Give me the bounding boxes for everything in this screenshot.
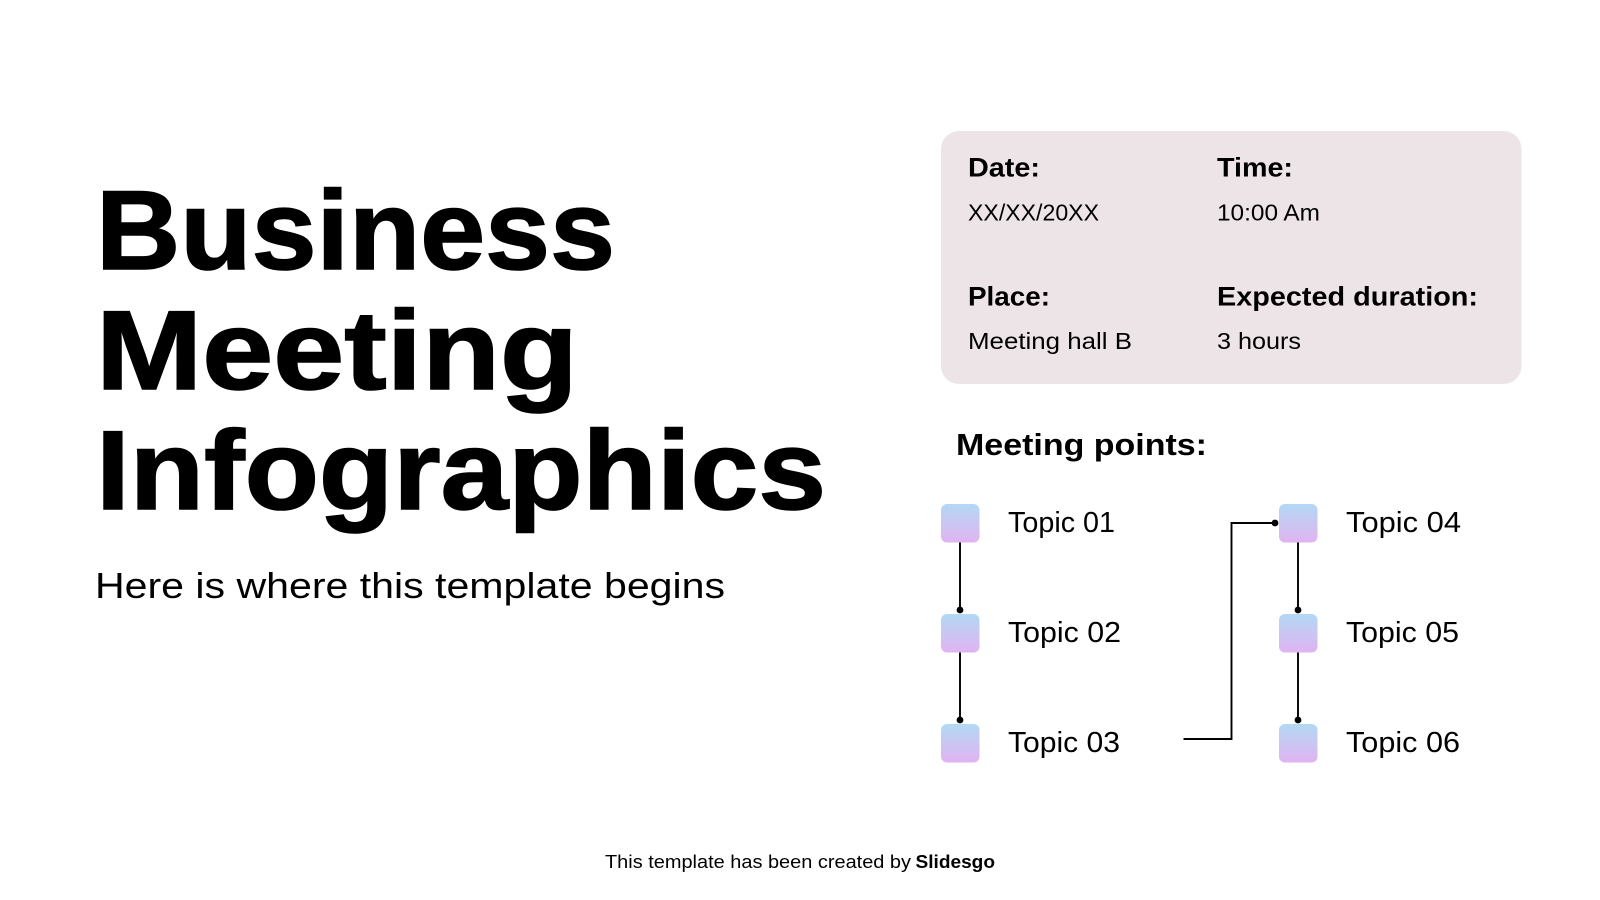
topic 03: Topic 03 (1008, 727, 1120, 759)
title: Business (96, 168, 615, 293)
date label: Date: (968, 152, 1040, 182)
topic 03 (941, 724, 1120, 762)
topic 06: Topic 06 (1346, 727, 1460, 759)
topic 01: Topic 01 (1008, 507, 1115, 539)
topic 04 (1279, 504, 1461, 542)
place label: Place: (968, 282, 1050, 312)
time label: Time: (1217, 152, 1293, 182)
footer credit: Slidesgo (916, 851, 995, 872)
panel: meeting details (941, 131, 1522, 384)
topic 05 (1279, 614, 1459, 652)
duration label: Expected duration: (1217, 282, 1478, 312)
duration value: 3 hours (1217, 328, 1301, 354)
topic 02 (941, 614, 1121, 652)
topic 04: Topic 04 (1346, 507, 1461, 539)
topic 01 (941, 504, 1115, 542)
subtitle: Here is where this template begins (95, 565, 725, 606)
topic 02: Topic 02 (1008, 617, 1121, 649)
date value: XX/XX/20XX (968, 200, 1099, 226)
place value: Meeting hall B (968, 328, 1132, 354)
title: Infographics (96, 408, 826, 533)
topic 05: Topic 05 (1346, 617, 1459, 649)
meeting points heading: Meeting points: (956, 427, 1207, 462)
topic 06 (1279, 724, 1460, 762)
time value: 10:00 Am (1217, 200, 1320, 226)
title (96, 168, 826, 533)
footer credit: This template has been created by (605, 851, 912, 872)
connector dots (957, 520, 1301, 723)
connector lines (960, 523, 1298, 739)
title: Meeting (96, 288, 578, 413)
